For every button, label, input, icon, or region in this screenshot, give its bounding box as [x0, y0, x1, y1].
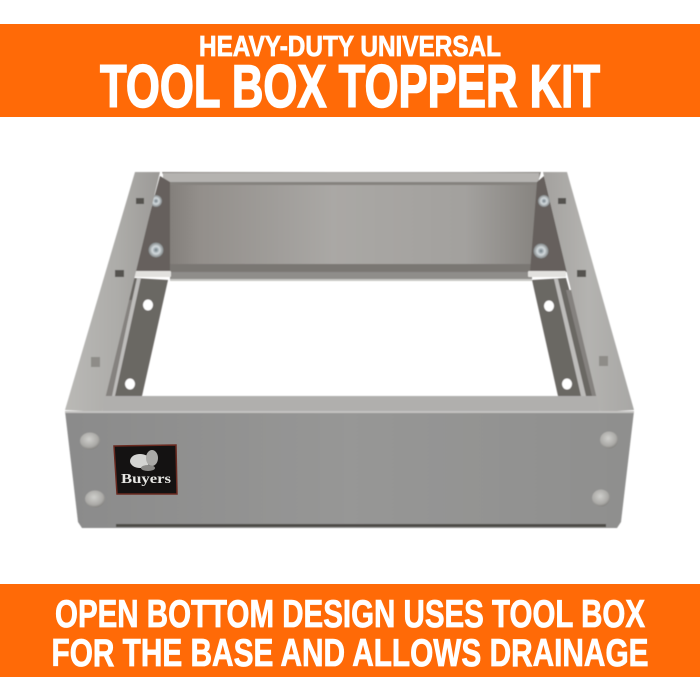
front panel — [65, 411, 634, 528]
right rail — [543, 172, 634, 412]
bottom banner — [0, 584, 700, 677]
mounting holes — [125, 300, 153, 390]
logo mascot — [130, 450, 158, 471]
logo badge: Buyers — [114, 445, 177, 494]
mounting holes — [544, 300, 572, 390]
left rail — [65, 172, 160, 412]
back panel — [162, 172, 541, 281]
bolts — [148, 195, 164, 258]
heading: heavy-duty universal: HEAVY-DUTY UNIVERSAL — [199, 31, 501, 63]
left side bracket — [105, 176, 171, 396]
front top lip — [102, 396, 600, 412]
product photo: tool box topper frame — [65, 172, 634, 528]
bolts — [534, 195, 550, 258]
right side bracket — [528, 176, 599, 396]
logo wordmark: Buyers — [121, 472, 172, 487]
top banner — [0, 24, 700, 117]
rivets — [80, 432, 618, 508]
